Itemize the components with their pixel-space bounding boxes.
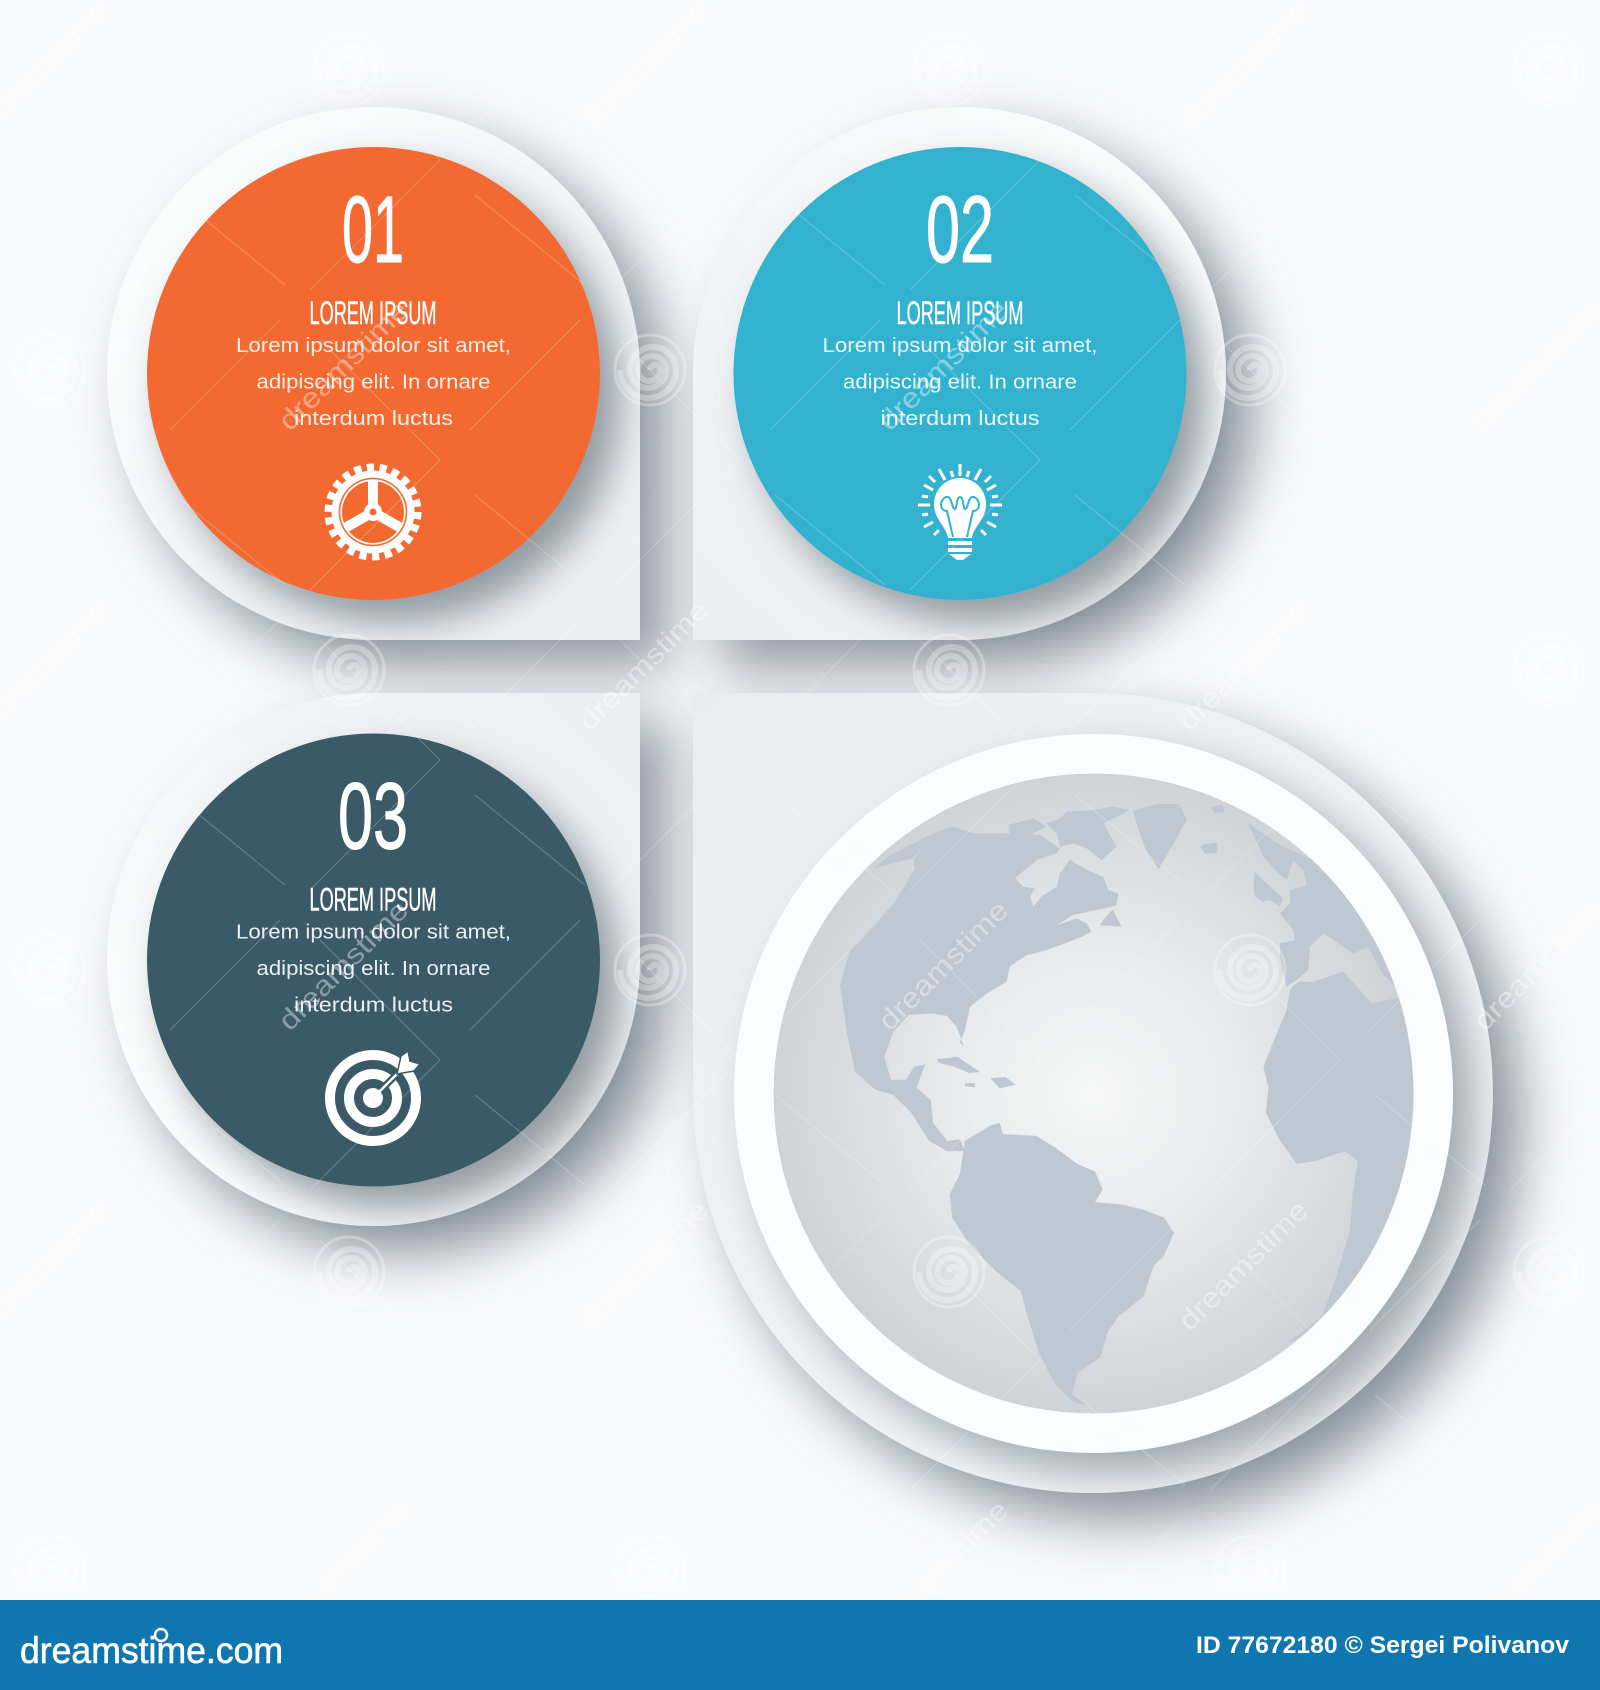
watermark: text: dreamstime xyxy=(1467,1494,1600,1636)
Svalbard xyxy=(1210,804,1225,813)
footer credit: ID 77672180 © Sergei Polivanov xyxy=(1196,1632,1570,1659)
Europe xyxy=(1248,823,1400,990)
icon: gear xyxy=(328,468,418,556)
watermark: text: dreamstime xyxy=(872,1494,1014,1636)
footer bar xyxy=(0,1600,1600,1690)
panel 03 backing plate xyxy=(107,693,640,1226)
watermark: text: dreamstime xyxy=(572,0,714,136)
watermark: text: dreamstime xyxy=(572,594,714,736)
watermark: text: dreamstime xyxy=(272,294,414,436)
body text: interdum luctus xyxy=(880,408,1040,430)
Greenland xyxy=(1133,804,1187,869)
Iceland xyxy=(1201,842,1217,854)
watermark: text: dreamstime xyxy=(1467,894,1600,1036)
British Isles xyxy=(1253,872,1283,907)
number 01: 01 xyxy=(342,177,404,283)
icon: light bulb xyxy=(918,464,1002,560)
body text xyxy=(236,335,511,430)
watermark: text: dreamstime xyxy=(1172,0,1314,136)
Arctic islands xyxy=(1008,807,1130,860)
heading: LOREM IPSUM xyxy=(896,295,1024,331)
Cuba xyxy=(937,1057,980,1073)
watermark: text: dreamstime xyxy=(272,1494,414,1636)
watermark: text: dreamstime xyxy=(872,294,1014,436)
body text xyxy=(236,922,511,1016)
panel 01: orange circle xyxy=(147,147,600,600)
body text: adipiscing elit. In ornare xyxy=(843,372,1077,394)
North America xyxy=(840,827,1118,1151)
panel 01 backing plate xyxy=(107,107,640,640)
globe backing plate xyxy=(693,693,1493,1493)
icon: target with arrow xyxy=(330,1051,420,1141)
body text xyxy=(822,335,1098,430)
Alaska xyxy=(873,833,933,868)
Newfoundland xyxy=(1100,910,1122,927)
watermark: text: dreamstime xyxy=(872,894,1014,1036)
watermark: text: dreamstime xyxy=(572,1194,714,1336)
Hispaniola xyxy=(965,1077,1016,1088)
watermark: text: dreamstime xyxy=(1467,294,1600,436)
body text: Lorem ipsum dolor sit amet, xyxy=(822,335,1098,357)
number 02: 02 xyxy=(926,177,994,283)
body text: adipiscing elit. In ornare xyxy=(256,958,490,980)
globe xyxy=(774,774,1434,1414)
body text: Lorem ipsum dolor sit amet, xyxy=(236,922,511,944)
footer logo: dreamstime.com xyxy=(20,1630,283,1671)
panel 02: blue circle xyxy=(734,147,1186,600)
body text: Lorem ipsum dolor sit amet, xyxy=(236,335,511,357)
continents xyxy=(840,804,1434,1406)
body text: interdum luctus xyxy=(294,994,453,1016)
ocean xyxy=(774,774,1414,1414)
panel 03: dark circle xyxy=(147,734,600,1186)
body text: interdum luctus xyxy=(294,408,453,430)
watermark: text: dreamstime xyxy=(1172,1194,1314,1336)
panel 02 backing plate xyxy=(693,107,1226,640)
globe ring xyxy=(734,734,1453,1453)
number 03: 03 xyxy=(338,764,408,870)
body text: adipiscing elit. In ornare xyxy=(256,372,490,394)
Iceland west xyxy=(1200,846,1215,854)
heading: LOREM IPSUM xyxy=(310,295,436,331)
watermark: text: dreamstime xyxy=(1172,594,1314,736)
watermark: text: dreamstime xyxy=(272,894,414,1036)
heading: LOREM IPSUM xyxy=(310,882,436,918)
Africa xyxy=(1264,972,1414,1346)
South America xyxy=(950,1123,1174,1406)
